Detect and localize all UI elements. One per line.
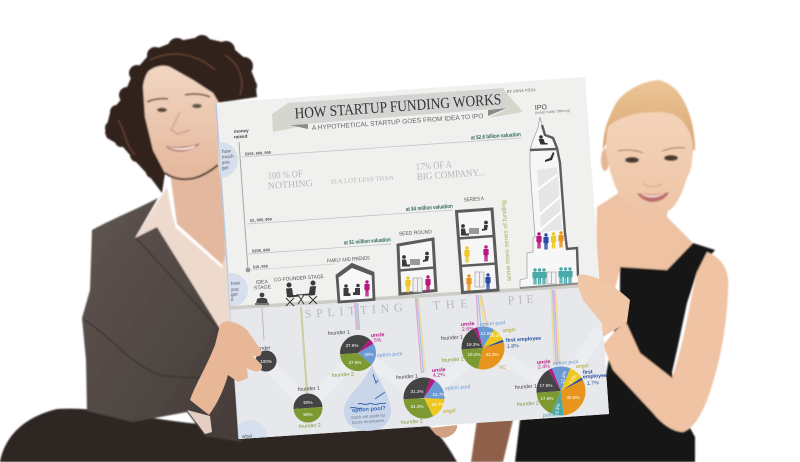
pie: family and friends: founder 1 [328,329,350,337]
pie: family and friends: uncle [371,332,385,339]
pie: seed round [396,367,470,426]
pie: series A: 2.6% [462,326,474,333]
icon: people in house [344,284,360,296]
icon: desk scene [402,252,429,266]
pie: co-founder stage: founder 2 [299,422,321,430]
ribbon folds [290,108,507,129]
man face [143,66,219,180]
man lapel fold [84,238,220,378]
valuation line: 2 million: at $4 million valuation [406,204,453,213]
pie: family and friends: 37.5% [348,360,362,365]
stage: family and friends: FAMILY AND FRIENDS [327,255,370,264]
pie: family and friends: 20% [364,352,374,357]
pie: IPO: 9.5% [568,373,578,385]
money axis [239,142,250,272]
pie: series A: VC [499,364,507,371]
side bubble: what [238,420,267,439]
quote: is a lot less than: IS A LOT LESS THAN [331,175,394,186]
quote: 17% of a big company: BIG COMPANY... [416,167,485,183]
side bubble: what: what [242,433,253,440]
quote: 100% of nothing: NOTHING [268,179,313,192]
icon: two founders at table [286,280,317,306]
ground line [230,284,600,308]
side bubble: how much you get: get [222,165,229,171]
pie: series A: angel [503,327,516,334]
quote: 100% of nothing [268,170,313,192]
stage: idea stage: STAGE [254,284,272,291]
pie: seed round: 31.2% [410,404,424,409]
stage: IPO: IPO [535,104,548,112]
pie: IPO: employee [583,373,607,380]
woman dress [515,243,715,462]
pie: series A: uncle [461,321,475,328]
pie: family and friends [328,329,402,379]
stage: seed round: SEED ROUND [399,229,432,237]
pie: IPO: 1.7% [587,380,599,387]
woman eyes and brows [618,148,685,153]
tower base ledge [520,284,578,288]
callout: option pool drop: Stock set aside for [351,413,386,420]
pie: co-founder stage: founder 1 [298,385,320,393]
icon: executives [538,135,554,162]
pie: series A: 19.2% [466,342,480,347]
pie: series A: founder 2 [442,356,464,364]
photo: man holding the poster [0,35,457,462]
woman hair [603,80,695,150]
icon: seed building [398,239,436,294]
man shirt [135,187,234,334]
side bubble: how you get it: you [231,287,239,293]
pie: series A: 10.2% [489,333,503,338]
pie: co-founder stage [298,385,321,430]
tower door [547,272,556,284]
pie: IPO: option pool [553,359,578,367]
pie: idea stage: founder [253,345,271,352]
woman arm [603,252,728,432]
stage: seed round [398,229,436,294]
man's lower fingers at poster bottom [430,425,457,438]
stage: co-founder stage: CO-FOUNDER STAGE [274,274,325,283]
pie: seed round: 4.2% [433,372,445,379]
stage: IPO [520,104,580,288]
ribbon band [287,88,507,125]
icon: desk scene [461,221,488,236]
stage: IPO: (Initial Public Offering) [535,109,570,115]
pie: series A: 19.2% [467,352,481,357]
man eyes and brows [147,94,210,102]
pie: seed round: 16.7% [431,402,445,407]
man jacket [82,198,242,442]
callout: option pool drop: option pool? [352,406,386,414]
pie: IPO: founder 2 [517,400,539,408]
side bubble: how much you get: you [222,160,230,166]
pie: IPO: uncle [537,359,551,366]
pie: seed round: founder 2 [401,418,423,426]
man neck [170,160,226,268]
section heading: splitting the pie: THE [432,296,468,312]
side bubble: how much you get: much [222,154,234,160]
callout: option pool drop [344,364,391,431]
woman nose shadow [643,183,662,187]
pie: seed round: 16.7% [432,392,446,397]
stage: idea stage: IDEA [256,279,269,286]
stage: family and friends [327,255,374,302]
valuation line: 10 thousand: $10,000 [253,264,269,270]
stage: co-founder stage [274,274,325,306]
woman neck and shoulders [595,185,693,300]
valuation line: 2 million: $2,000,000 [250,217,273,224]
pie: IPO: 8.3% [554,403,561,414]
icon: diver and swimmer [350,374,386,409]
author credit: BY ANNA VITAL [507,87,536,94]
title ribbon [272,88,523,132]
stage: idea stage [254,279,272,305]
section heading: splitting the pie [304,292,534,321]
side bubble: how you get it: get [231,291,238,298]
side bubble: how you get it: how [231,280,240,287]
pie: idea stage: 100% [260,359,272,364]
subtitle: A HYPOTHETICAL STARTUP GOES FROM IDEA TO IPO [312,113,484,132]
pie: seed round: angel [443,408,456,415]
man's shirt cuff [187,410,212,434]
pie: family and friends: 37.5% [345,343,359,348]
pie: series A: first employee [506,336,541,344]
pie: series A [441,320,541,371]
valuation line: 10 thousand [250,264,335,270]
quote: 17% of a big company: 17% OF A [415,159,453,173]
man mouth [165,143,200,152]
pie: series A: founder 1 [441,334,463,342]
pie: co-founder stage: 50% [303,412,313,417]
icon: series A building [456,209,498,292]
side bubble: how you get it: it [231,297,234,303]
pie: seed round: founder 1 [396,373,418,381]
man nose shadow [171,112,190,134]
pie: IPO: first [583,369,593,376]
valuation line: 350 million: $350,000,000 [245,151,271,157]
pie: IPO: 17.6% [540,396,554,401]
axis title: money raised [234,128,249,139]
pie: idea stage [253,345,276,372]
ribbon tail right [488,90,523,118]
pie: IPO: public [543,412,557,419]
tower people row [536,231,564,250]
pie: seed round: 31.2% [410,389,424,394]
stage: series A [456,196,498,292]
tower glass panel [537,167,562,232]
man beard line [165,165,218,179]
section heading: splitting the pie: SPLITTING [304,300,403,321]
poster left edge [216,103,239,439]
stage: series A: SERIES A [464,196,485,203]
quote: 100% of nothing: 100 % OF [268,170,303,182]
valuation line: 2 million [247,204,453,224]
pie: IPO: 30.8% [566,395,580,400]
poster sheet [216,77,609,439]
man hair [105,35,257,193]
icon: founder at laptop [255,293,269,305]
axis title: money raised: raised [234,134,248,139]
pie: IPO: 17.6% [539,383,553,388]
pie: IPO: 12.4% [560,371,567,385]
pie: family and friends: founder 2 [332,371,354,379]
icon: elevator door [413,278,422,292]
man's hand gripping the poster [190,321,262,415]
tower shadow edge [530,125,578,276]
valuation line: 200 thousand: $200,000 [252,248,271,254]
section heading: splitting the pie: PIE [507,292,534,307]
man trousers [0,409,457,462]
valuation line: 200 thousand [248,237,391,254]
pie: IPO: angel [576,363,589,370]
icon: elevator door [475,272,484,287]
pie: IPO: founder 1 [515,383,537,391]
side bubble: how you get it [228,273,248,306]
pie: series A: 1.8% [507,343,519,350]
woman ear [601,149,609,171]
pie: family and friends: option pool [377,351,402,359]
woman leg [471,420,513,462]
icon: skyscraper [520,117,580,288]
axis title: money raised: money [234,128,249,134]
pie: series A: 12.8% [480,331,494,336]
woman's hand gripping the poster [578,275,630,337]
icon: house [337,264,374,302]
valuation line: 350 million [242,132,521,157]
pie: series A: 33.3% [485,352,499,357]
tower lobby people [532,267,573,284]
pie: co-founder stage: 50% [303,400,313,405]
pie: IPO: 2.4% [538,364,550,370]
woman face [606,112,693,218]
side bubble: how much you get [218,142,238,178]
lighter zigzag band [240,330,600,408]
valuation line: 200 thousand: at $1 million valuation [344,237,391,246]
pie: family and friends: 5% [374,337,382,344]
callout: option pool drop: future employees. [352,418,385,425]
woman mouth [637,192,669,202]
connector ribbons [262,290,560,393]
pie: series A: option pool [480,320,505,328]
pie: seed round: option pool [445,384,470,392]
man hair highlights [118,54,242,155]
quote: 17% of a big company [415,159,485,183]
pie: IPO [515,359,607,419]
pie: seed round: uncle [432,367,446,374]
photo: woman holding the poster [471,80,728,462]
valuation line: 350 million: at $2.6 billion valuation [471,132,521,141]
main title: HOW STARTUP FUNDING WORKS [294,91,502,122]
side note: some more series of funding: some more series of funding [500,199,513,281]
ribbon tail left [272,103,308,132]
poster lower panel [230,285,609,439]
side bubble: how much you get: how [222,148,231,155]
